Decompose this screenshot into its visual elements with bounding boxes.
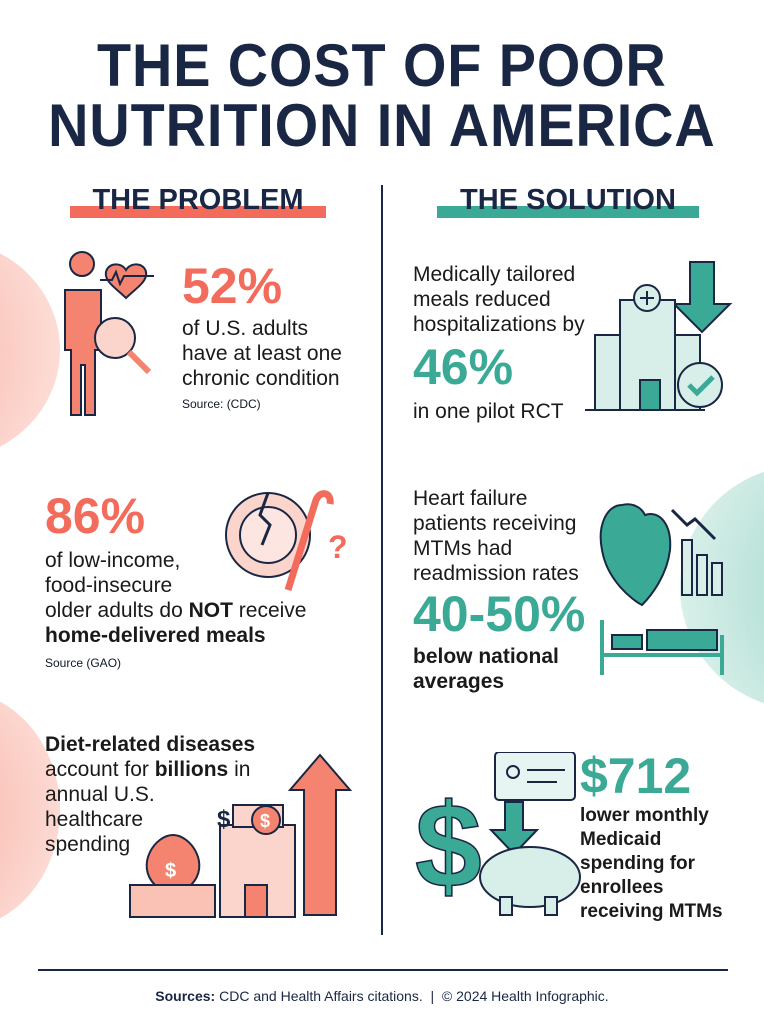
stat $712: receiving MTMs [580, 901, 723, 922]
stat 52%: 52% [182, 258, 282, 314]
stat $712 [580, 748, 723, 922]
stat 40-50%: readmission rates [413, 562, 579, 585]
stat 86%: of low-income, [45, 549, 180, 572]
stat 46%: meals reduced [413, 288, 551, 311]
icon: person with heart [64, 251, 154, 416]
stat diet-related: annual U.S. [45, 783, 155, 806]
stat 46%: Medically tailored [413, 263, 575, 286]
heading: the solution: THE SOLUTION [460, 184, 676, 216]
stat $712: lower monthly [580, 805, 709, 826]
stat 52%: have at least one [182, 342, 342, 365]
stat 52%: chronic condition [182, 367, 340, 390]
icon: money, building, arrow: $ [217, 806, 231, 833]
stat 46%: hospitalizations by [413, 313, 585, 336]
footer sources: Sources: CDC and Health Affairs citations. | © 2024 Health Infographic. [155, 988, 609, 1004]
icon: broken plate and cane [225, 490, 348, 591]
title: THE COST OF POOR [97, 32, 667, 99]
heading: the problem: THE PROBLEM [92, 184, 304, 216]
title: NUTRITION IN AMERICA [48, 92, 716, 159]
stat 86%: home-delivered meals [45, 624, 266, 647]
stat diet-related: Diet-related diseases [45, 733, 255, 756]
stat diet-related: spending [45, 833, 130, 856]
stat $712: enrollees [580, 877, 663, 898]
icon: hospital with arrow and check [585, 261, 732, 411]
stat 40-50%: averages [413, 670, 504, 693]
stat 46% [413, 263, 585, 423]
stat 86%: 86% [45, 488, 145, 544]
icon: dollar, card, piggy bank [415, 752, 581, 916]
stat $712: $712 [580, 748, 691, 804]
background circles [0, 240, 60, 460]
icon: broken plate and cane: ? [328, 529, 348, 565]
stat diet-related: account for billions in [45, 758, 250, 781]
text: Source (GAO) [45, 656, 121, 670]
stat diet-related [45, 733, 255, 856]
stat 52%: Source: (CDC) [182, 397, 261, 411]
stat $712: spending for [580, 853, 695, 874]
stat 40-50%: 40-50% [413, 586, 585, 642]
icon: money, building, arrow: $ [260, 811, 270, 831]
stat 40-50%: Heart failure [413, 487, 527, 510]
stat 86%: food-insecure [45, 574, 172, 597]
stat diet-related: healthcare [45, 808, 143, 831]
icon: money, building, arrow [129, 754, 352, 918]
stat 46%: in one pilot RCT [413, 400, 564, 423]
icon: heart, chart, bed [600, 503, 724, 675]
stat 40-50%: below national [413, 645, 559, 668]
stat 52% [182, 258, 342, 411]
stat $712: Medicaid [580, 829, 661, 850]
stat 46%: 46% [413, 339, 513, 395]
stat 86% [45, 488, 306, 670]
stat 52%: of U.S. adults [182, 317, 308, 340]
icon: money, building, arrow: $ [165, 860, 176, 882]
title [48, 32, 716, 159]
stat 40-50% [413, 487, 585, 693]
stat 40-50%: MTMs had [413, 537, 512, 560]
stat 86%: older adults do NOT receive [45, 599, 306, 622]
icon: dollar, card, piggy bank: $ [415, 779, 482, 913]
stat 40-50%: patients receiving [413, 512, 576, 535]
